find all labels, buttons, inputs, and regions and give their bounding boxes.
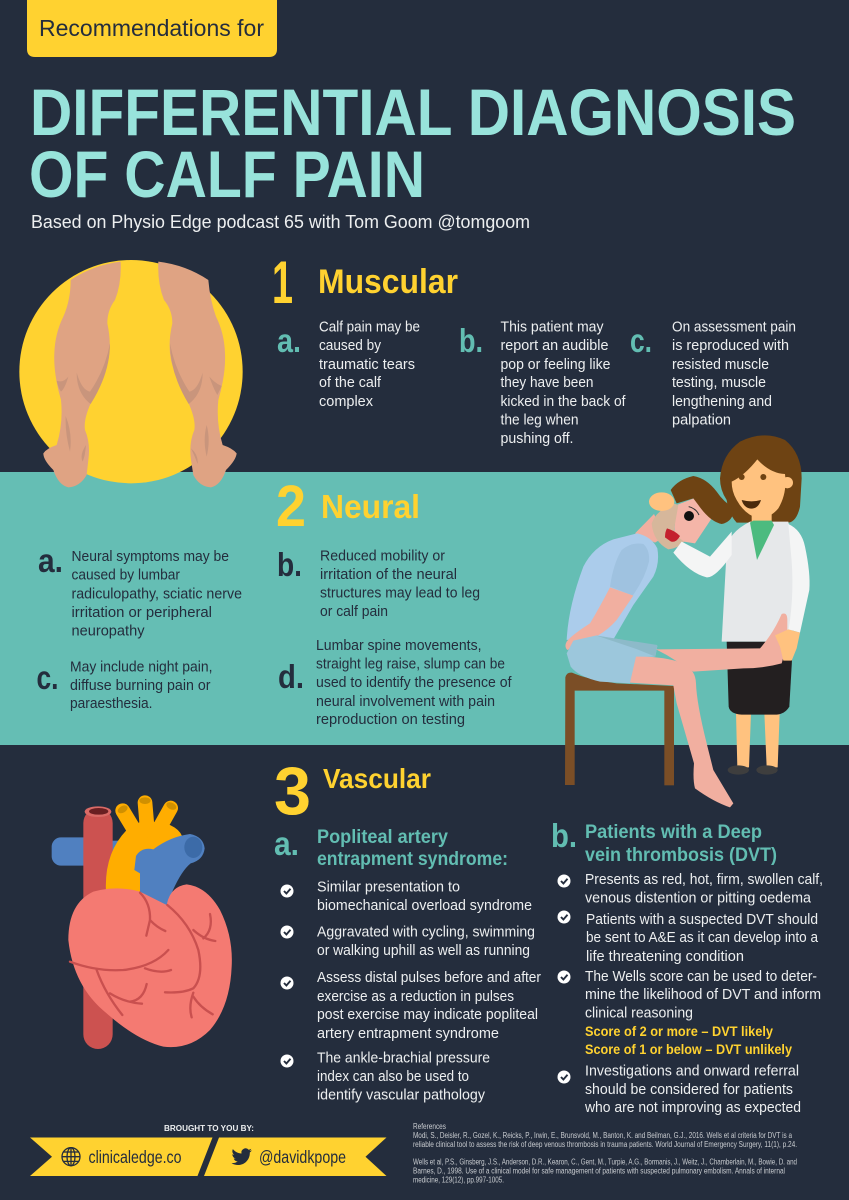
point b: Reduced mobility or [320,548,445,564]
ribbon: twitter [204,1138,386,1176]
bullet 3: post exercise may indicate popliteal [317,1007,538,1023]
point d: d. [278,658,304,695]
bullet 2 [280,924,535,959]
point a: irritation or peripheral [72,605,212,621]
point c: testing, muscle [672,375,766,391]
point a: neuropathy [72,624,145,640]
number 1: 1 [272,249,293,316]
column a: popliteal artery entrapment [274,825,541,1104]
ribbon: website [30,1138,212,1176]
bullet 3: artery entrapment syndrome [317,1026,499,1042]
tag: recommendations for: Recommendations for [39,15,264,41]
bullet 4: who are not improving as expected [584,1100,801,1116]
references: References [413,1122,446,1131]
point b: pushing off. [500,431,574,447]
point b [459,320,626,447]
point c: is reproduced with [672,338,789,354]
point d: neural involvement with pain [316,694,495,710]
bullet 3: exercise as a reduction in pulses [317,989,514,1005]
illustration: anatomical heart [52,797,232,1049]
bullet 2 [558,910,819,965]
point a: Calf pain may be [319,320,420,336]
section 1: muscular [272,249,796,447]
column a: popliteal artery entrapment: entrapment syndrome: [317,849,508,870]
ribbon: website: clinicaledge.co [88,1147,182,1167]
bullet 3 with Wells scores: Score of 1 or below – DVT unlikely [585,1042,792,1057]
bullet 3 with Wells scores [558,969,821,1057]
column b: deep vein thrombosis: b. [551,817,577,854]
references [413,1122,797,1184]
point b [277,546,480,620]
bullet 3 with Wells scores: mine the likelihood of DVT and inform [585,987,821,1003]
column b: deep vein thrombosis: Patients with a Deep [585,822,762,843]
point c: resisted muscle [672,357,769,373]
point a: complex [319,394,374,410]
bullet 2: life threatening condition [586,949,744,965]
bullet 3: Assess distal pulses before and after [317,970,541,986]
bullet 4: identify vascular pathology [317,1088,486,1104]
heading: vascular: Vascular [323,763,431,794]
point b: report an audible [500,338,608,354]
point a: of the calf [319,375,382,391]
chair [565,673,674,785]
point d: Lumbar spine movements, [316,638,482,654]
clinician arm and hands [649,492,800,661]
point c: diffuse burning pain or [70,678,211,694]
references: medicine, 129(12), pp.997-1005. [413,1176,504,1184]
illustration: calves on yellow circle [19,260,279,487]
point d: straight leg raise, slump can be [316,656,505,672]
patient [565,476,787,807]
bullet 2: or walking uphill as well as running [317,943,530,959]
bullet 1 [280,880,532,914]
point b: b. [277,546,302,583]
point a: caused by lumbar [72,568,180,584]
number 3: 3 [274,753,311,829]
bullet 4 [280,1050,490,1104]
point a [38,542,242,640]
point a [277,320,420,410]
column a: popliteal artery entrapment: a. [274,825,299,862]
bullet 1: venous distention or pitting oedema [585,890,812,906]
point b: pop or feeling like [500,357,610,373]
icon: twitter bird [232,1148,252,1165]
bullet 2: Aggravated with cycling, swimming [317,924,535,940]
point d: reproduction on testing [316,712,465,728]
point b: they have been [500,375,594,391]
column b: deep vein thrombosis: vein thrombosis (DVT) [585,845,777,866]
title [29,75,796,211]
point c: c. [36,659,58,696]
heading: neural: Neural [321,488,420,525]
column b: deep vein thrombosis [551,817,823,1116]
bullet 1 [558,872,823,906]
point b: irritation of the neural [320,567,457,583]
bullet 1: Similar presentation to [317,880,460,896]
point c [630,320,796,428]
bullet 4 [558,1064,801,1116]
footer: brought to you by: BROUGHT TO YOU BY: [164,1123,254,1133]
illustration: slump test with clinician and patient [565,435,810,807]
point a: radiculopathy, sciatic nerve [72,586,242,602]
number 2: 2 [276,474,306,539]
column a: popliteal artery entrapment: Popliteal artery [317,827,448,848]
point b: b. [459,322,483,359]
point c: lengthening and [672,394,772,410]
bullet 1: Presents as red, hot, firm, swollen calf, [585,872,823,888]
title: OF CALF PAIN [29,137,425,211]
point b: This patient may [500,320,604,336]
point b: the leg when [500,412,578,428]
icon: globe [62,1148,80,1166]
bullet 3 [280,970,541,1042]
bullet 4: The ankle-brachial pressure [317,1050,490,1066]
point a: traumatic tears [319,357,415,373]
bullet 4: Investigations and onward referral [585,1064,799,1080]
bullet 4: index can also be used to [317,1069,469,1085]
point c: May include night pain, [70,660,212,676]
bullet 1: biomechanical overload syndrome [317,898,532,914]
bullet 3 with Wells scores: clinical reasoning [585,1006,693,1022]
bullet 3 with Wells scores: Score of 2 or more – DVT likely [585,1024,773,1039]
footer: brought to you by [30,1123,386,1176]
bullet 2: Patients with a suspected DVT should [586,912,818,928]
point c: paraesthesia. [70,696,152,712]
section 3: vascular [274,753,823,1116]
section 2: neural [36,474,512,728]
tag: recommendations for [27,0,277,57]
point a: a. [38,542,63,579]
point a: a. [277,322,301,359]
doctor [720,435,810,775]
bullet 2: be sent to A&E as it can develop into a [586,930,819,946]
bullet 4: should be considered for patients [585,1082,793,1098]
point a: Neural symptoms may be [72,549,229,565]
ribbon: twitter: @davidkpope [259,1147,346,1167]
bullet 3 with Wells scores: The Wells score can be used to deter- [585,969,817,985]
heading: muscular: Muscular [318,263,458,301]
point d [278,638,512,728]
point b: structures may lead to leg [320,586,480,602]
subtitle: Based on Physio Edge podcast 65 with Tom Goom @tomgoom [31,211,530,232]
point c [36,659,212,712]
point c: c. [630,322,652,359]
point b: or calf pain [320,604,388,620]
point b: kicked in the back of [500,394,626,410]
point a: caused by [319,338,382,354]
point c: On assessment pain [672,320,796,336]
point d: used to identify the presence of [316,675,512,691]
point c: palpation [672,412,731,428]
